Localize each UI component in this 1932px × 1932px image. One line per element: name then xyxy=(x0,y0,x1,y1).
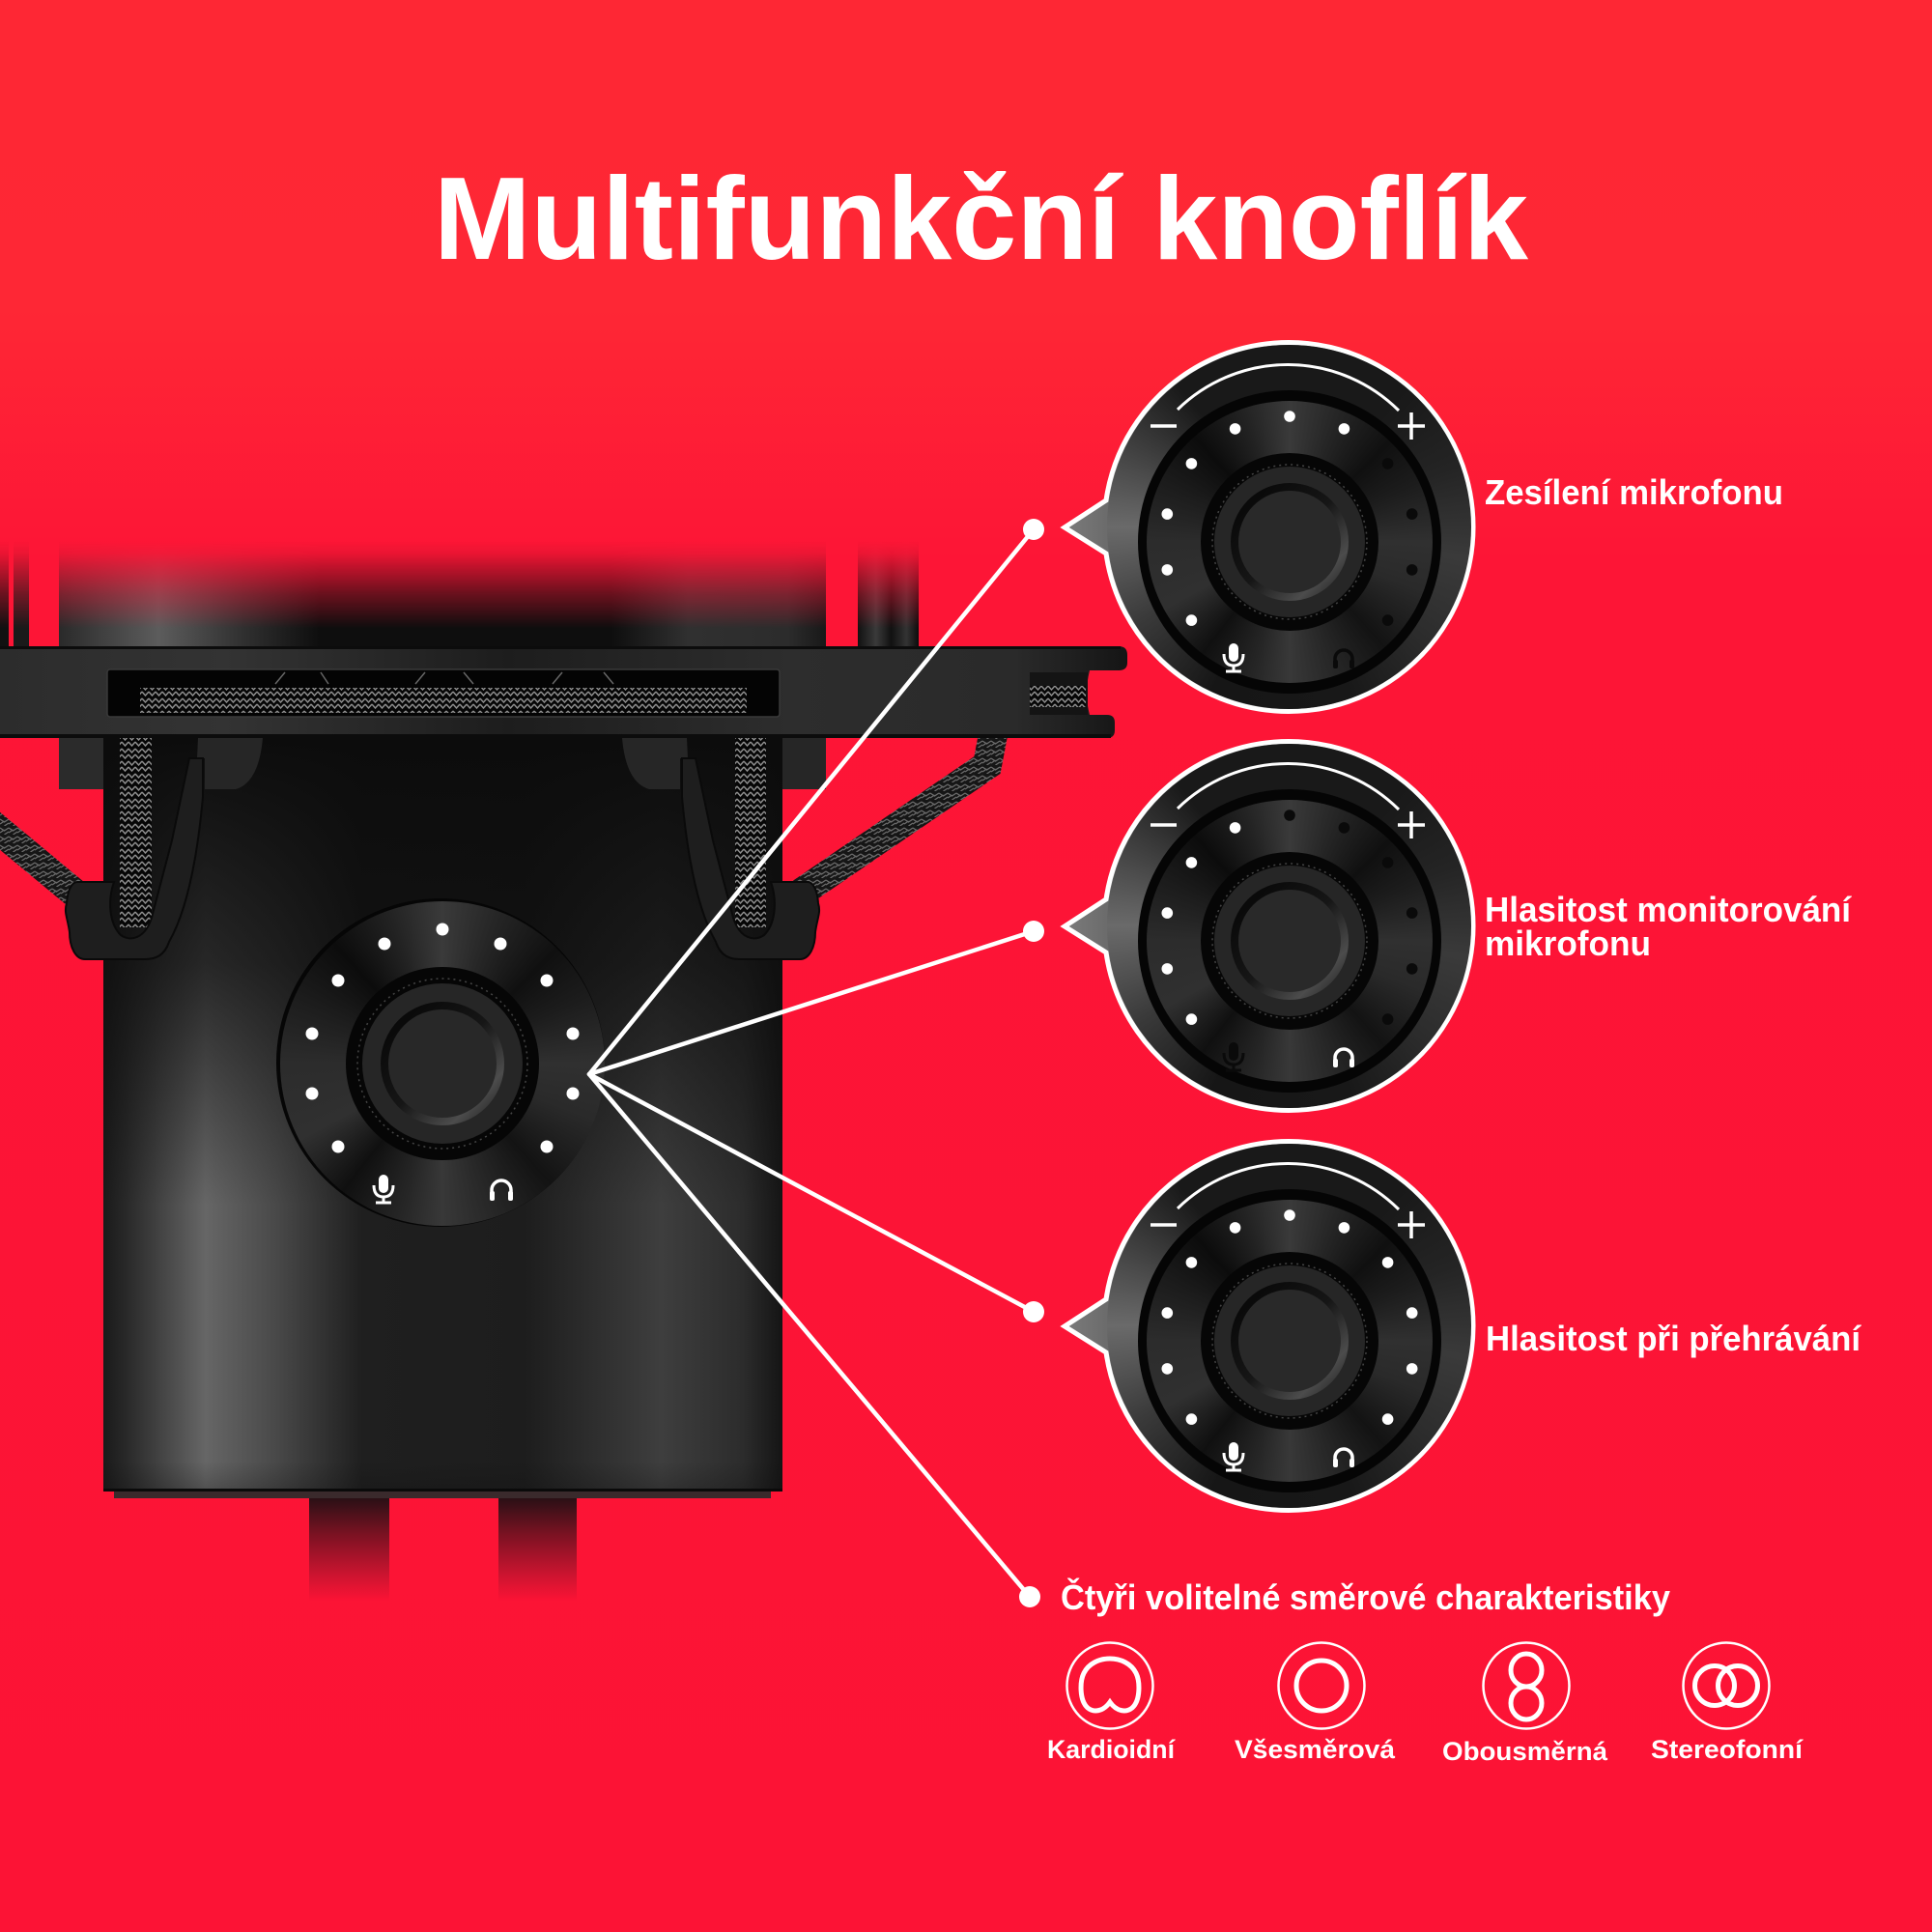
label: monitoring volume: mikrofonu xyxy=(1485,923,1651,963)
woven band xyxy=(140,688,747,713)
LED indicators unlit xyxy=(1382,458,1417,626)
left elastic clip xyxy=(66,758,203,959)
callout: monitoring volume knob xyxy=(1065,742,1473,1111)
shock mount tabs xyxy=(197,738,688,789)
line to mic gain xyxy=(589,519,1044,1074)
icon: microphone lit xyxy=(1224,643,1243,671)
microphone body xyxy=(103,738,782,1492)
icon: cardioid pattern xyxy=(1066,1642,1153,1729)
icon: microphone lit xyxy=(1224,1442,1243,1470)
base plate xyxy=(114,1492,771,1498)
icon: omnidirectional pattern xyxy=(1279,1642,1364,1729)
icon: bidirectional pattern xyxy=(1484,1642,1569,1729)
icon: stereo pattern xyxy=(1683,1642,1770,1729)
callout: playback volume knob xyxy=(1065,1142,1473,1511)
rear capsule fading into background xyxy=(0,547,919,646)
line to polar patterns xyxy=(589,1074,1040,1607)
icon: headphones unlit xyxy=(1333,650,1354,668)
icon: microphone xyxy=(374,1175,393,1203)
capsule collar under shock mount xyxy=(59,738,826,789)
heading: polar patterns: Čtyři volitelné směrové charakteristiky xyxy=(1061,1577,1670,1617)
icon: microphone unlit xyxy=(1224,1042,1243,1070)
leader lines xyxy=(589,519,1044,1607)
line to playback volume xyxy=(589,1074,1044,1322)
callout: mic gain knob xyxy=(1065,343,1473,711)
label: stereo: Stereofonní xyxy=(1651,1735,1804,1764)
title: Multifunkční knoflík xyxy=(434,153,1528,284)
main control knob xyxy=(276,898,605,1227)
shock mount ring xyxy=(0,646,1127,738)
label: bidirectional: Obousměrná xyxy=(1442,1737,1608,1766)
ring thread xyxy=(1030,672,1088,715)
LED indicators lit xyxy=(1161,411,1350,626)
stand legs xyxy=(309,1498,577,1601)
right elastic clip xyxy=(682,758,819,959)
label: mic gain: Zesílení mikrofonu xyxy=(1485,472,1783,512)
vertical braided cables xyxy=(120,738,766,927)
LED indicators lit xyxy=(1161,822,1240,1025)
line to monitoring volume xyxy=(589,921,1044,1074)
label: omnidirectional: Všesměrová xyxy=(1235,1735,1396,1764)
icon: headphones lit xyxy=(1333,1449,1354,1467)
label: playback volume: Hlasitost při přehrávání xyxy=(1486,1319,1861,1358)
label: cardioid: Kardioidní xyxy=(1047,1735,1176,1764)
LED indicators unlit xyxy=(1284,810,1417,1025)
slot marks xyxy=(275,672,613,684)
label: monitoring volume: Hlasitost monitorování xyxy=(1485,890,1852,929)
diagonal suspension cables xyxy=(0,724,995,903)
icon: headphones lit xyxy=(1333,1049,1354,1067)
icon: headphones xyxy=(490,1180,513,1201)
LED indicators xyxy=(305,923,580,1153)
ring slot xyxy=(107,669,780,717)
LED indicators lit xyxy=(1161,1209,1417,1425)
microphone illustration xyxy=(0,512,1127,1601)
